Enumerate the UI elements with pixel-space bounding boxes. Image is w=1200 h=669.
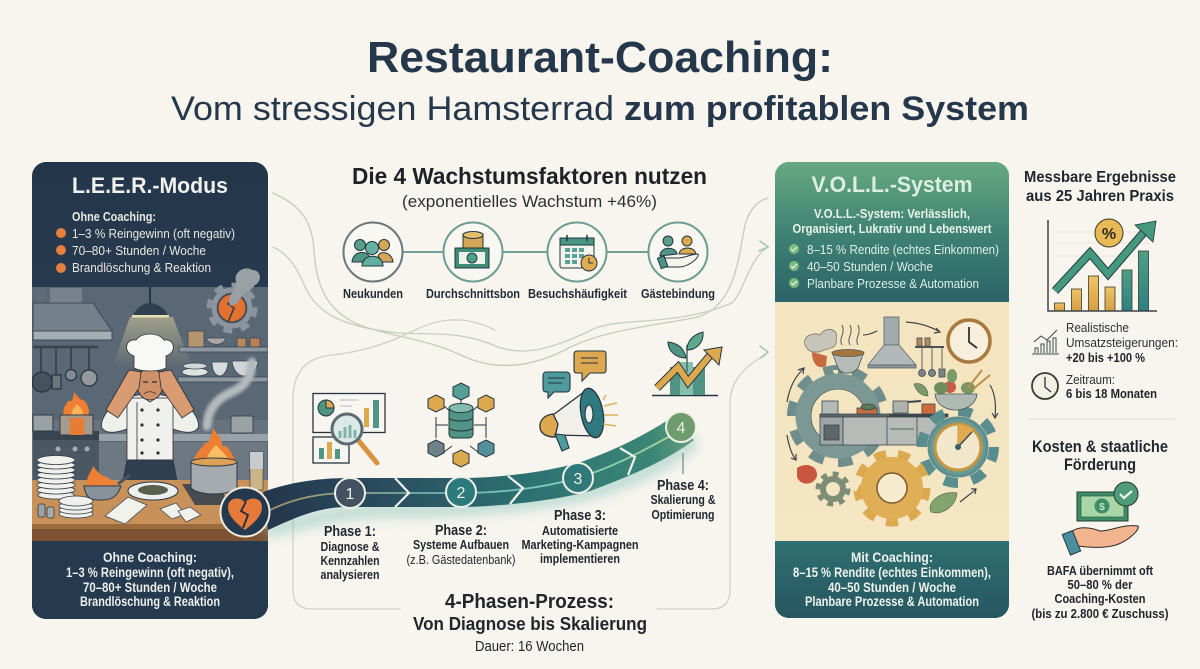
illustration: stressed chef in burning kitchen — [32, 268, 268, 541]
broken gear with smoke — [209, 268, 260, 331]
large grey gear — [792, 370, 884, 462]
bottom text block — [32, 541, 268, 619]
pot with steam and chef hat — [805, 325, 864, 373]
bottom text block: Ohne Coaching: — [103, 549, 197, 565]
heading: Kosten und Förderung: Förderung — [1064, 456, 1136, 474]
step 4: 4 — [677, 420, 686, 437]
step 1: 1 — [346, 486, 355, 503]
heading: Messbare Ergebnisse — [1024, 169, 1176, 205]
phase 2 label: Systeme Aufbauen — [413, 537, 509, 552]
phase 1 label: Diagnose & — [320, 539, 380, 554]
stat: Umsatzsteigerungen: +20 bis +100 % — [1066, 350, 1145, 365]
list: mit Coaching: 40–50 Stunden / Woche — [807, 259, 933, 274]
phase 1 label: Kennzahlen — [320, 553, 380, 568]
phase 4 label: Skalierung & — [650, 492, 716, 507]
bottom text block: 8–15 % Rendite (echtes Einkommen), — [793, 565, 991, 580]
phase icon: megaphone with speech bubbles — [540, 351, 618, 451]
title — [171, 33, 1029, 128]
heading: 4-Phasen-Prozess — [413, 591, 647, 655]
subheading: Organisiert, Lukrativ und Lebenswert — [792, 221, 992, 236]
heading: Kosten und Förderung: Kosten & staatliche — [1032, 438, 1168, 456]
phase 4 label: Phase 4: — [657, 478, 709, 494]
bottom text block: 70–80+ Stunden / Woche — [83, 580, 217, 595]
bottom text block: Planbare Prozesse & Automation — [805, 594, 979, 609]
factor: Besuchshäufigkeit — [548, 222, 606, 282]
bottom text block: 40–50 Stunden / Woche — [828, 580, 956, 595]
golden gear — [858, 454, 926, 522]
phase icon: growth chart with plant — [652, 332, 722, 396]
heading: L.E.E.R.-Modus: L.E.E.R.-Modus — [72, 173, 228, 198]
heading: V.O.L.L.-System: V.O.L.L.-System — [812, 172, 972, 197]
text: BAFA Zuschuss: (bis zu 2.800 € Zuschuss) — [1032, 606, 1168, 621]
heading: Wachstumsfaktoren: (exponentielles Wachstum +46%) — [402, 192, 657, 211]
icon: clock — [1032, 373, 1058, 399]
phase 4 label: Optimierung — [652, 507, 715, 522]
icon: small bar chart — [1032, 330, 1059, 354]
back counter and stove — [33, 431, 268, 481]
scattered papers — [105, 497, 201, 524]
bottom text block: Mit Coaching: — [851, 549, 933, 565]
list: ohne Coaching — [56, 209, 235, 275]
kitchen range — [820, 401, 948, 445]
step 2: 2 — [457, 485, 466, 502]
growth factor row — [343, 222, 715, 301]
phase 1 label: analysieren — [320, 567, 380, 582]
plate with food — [128, 482, 178, 500]
chevrons — [395, 448, 635, 507]
stat: Umsatzsteigerungen: Realistische — [1066, 320, 1129, 335]
stat: Zeitraum: 6 bis 18 Monaten — [1066, 386, 1157, 401]
factor: Gästebindung — [648, 222, 708, 282]
factor labels: Durchschnittsbon — [426, 287, 520, 301]
bottom text block: 1–3 % Reingewinn (oft negativ), — [66, 565, 234, 580]
factor: Neukunden — [344, 222, 402, 282]
stat: Umsatzsteigerungen — [1032, 320, 1178, 365]
step 3: 3 — [574, 471, 583, 488]
phase 2 label: Phase 2: — [435, 523, 487, 539]
list: ohne Coaching: Ohne Coaching: — [72, 209, 156, 224]
phase 4 label — [650, 453, 716, 522]
wall clock — [948, 320, 990, 362]
rising smoke — [207, 362, 252, 426]
phase 3 label: Automatisierte — [542, 523, 618, 538]
phase 1 label: Phase 1: — [324, 524, 376, 540]
phase 3 label: Marketing-Kampagnen — [522, 537, 639, 552]
factor labels: Besuchshäufigkeit — [528, 287, 628, 301]
heading: 4-Phasen-Prozess: 4-Phasen-Prozess: — [445, 591, 614, 613]
text: BAFA Zuschuss — [1032, 563, 1168, 621]
kitchen hood — [33, 288, 112, 340]
list: mit Coaching — [789, 242, 999, 291]
icon: hand with banknote and check: $ — [1099, 502, 1105, 513]
teal clock gear — [922, 411, 994, 483]
chart: rising bars and arrow — [1048, 219, 1157, 311]
list: ohne Coaching: Brandlöschung & Reaktion — [72, 260, 211, 275]
chart: rising bars and arrow: % — [1102, 226, 1116, 243]
back pot — [231, 416, 253, 433]
list: ohne Coaching: 70–80+ Stunden / Woche — [72, 243, 206, 258]
stat: Zeitraum — [1032, 372, 1157, 401]
subheading — [792, 206, 992, 236]
factor: Durchschnittsbon — [444, 222, 502, 282]
title: Vom stressigen Hamsterrad zum profitablen System — [171, 90, 1029, 128]
factor labels — [343, 287, 715, 301]
leaves, strawberry and flow arrows — [787, 322, 998, 513]
text: BAFA Zuschuss: Coaching-Kosten — [1054, 591, 1146, 606]
process ribbon — [263, 412, 696, 530]
pot on the stove with flame — [33, 392, 93, 435]
phase 3 label: Phase 3: — [554, 508, 606, 524]
step 4 — [666, 412, 696, 442]
stat: Zeitraum: Zeitraum: — [1066, 372, 1115, 387]
panel: V.O.L.L.-System — [775, 162, 1009, 618]
list: ohne Coaching: 1–3 % Reingewinn (oft negativ) — [72, 226, 235, 241]
step 2 — [446, 477, 476, 507]
step 3 — [563, 463, 593, 493]
text: BAFA Zuschuss: BAFA übernimmt oft — [1047, 563, 1154, 578]
main counter — [32, 480, 268, 541]
step 1 — [335, 478, 365, 508]
heading: Kosten und Förderung — [1032, 438, 1168, 474]
illustration: kitchen system of gears — [775, 302, 1009, 541]
utensil rack — [915, 338, 945, 377]
panel: L.E.E.R.-Modus — [32, 162, 268, 619]
list: mit Coaching: 8–15 % Rendite (echtes Einkommen) — [807, 242, 999, 257]
connector curves between panels — [273, 193, 768, 609]
phase 3 label — [522, 508, 639, 566]
salad bowl on gear — [934, 369, 990, 410]
stressed chef — [102, 334, 198, 481]
frying pan with flame — [84, 466, 130, 500]
phase icon: database network — [428, 383, 494, 467]
heart badge — [220, 488, 270, 536]
phase 2 label: (z.B. Gästedatenbank) — [406, 552, 516, 567]
heading: Wachstumsfaktoren — [352, 163, 707, 211]
extraction hood — [868, 317, 916, 368]
phase 2 label — [406, 523, 516, 567]
phase 3 label: implementieren — [540, 551, 620, 566]
hanging pans and utensils — [32, 347, 98, 392]
heading: 4-Phasen-Prozess: Dauer: 16 Wochen — [475, 639, 584, 655]
heading: Messbare Ergebnisse: aus 25 Jahren Praxis — [1026, 188, 1174, 205]
factor labels: Gästebindung — [641, 287, 715, 301]
stacked plates — [37, 456, 93, 518]
stat: Umsatzsteigerungen: Umsatzsteigerungen: — [1066, 335, 1178, 350]
factor labels: Neukunden — [343, 287, 403, 301]
title: Restaurant-Coaching: — [367, 33, 833, 82]
icon: hand with banknote and check — [1062, 482, 1138, 555]
ceiling lamp and light cone — [114, 287, 190, 362]
big burning pot — [182, 428, 263, 505]
heading: Wachstumsfaktoren: Die 4 Wachstumsfaktoren nutzen — [352, 163, 707, 189]
small gear — [818, 474, 848, 504]
phase icon: analysis dashboard — [313, 394, 385, 463]
subheading: V.O.L.L.-System: Verlässlich, — [814, 206, 970, 221]
list: mit Coaching: Planbare Prozesse & Automation — [807, 276, 979, 291]
bottom text block: Brandlöschung & Reaktion — [80, 594, 220, 609]
phase labels — [320, 453, 716, 582]
shelves with jars and dishes — [178, 331, 268, 382]
heading: 4-Phasen-Prozess: Von Diagnose bis Skalierung — [413, 613, 647, 634]
phase 1 label — [320, 524, 380, 582]
heading: Messbare Ergebnisse: Messbare Ergebnisse — [1024, 169, 1176, 186]
text: BAFA Zuschuss: 50–80 % der — [1068, 577, 1132, 592]
bottom text block — [775, 541, 1009, 618]
